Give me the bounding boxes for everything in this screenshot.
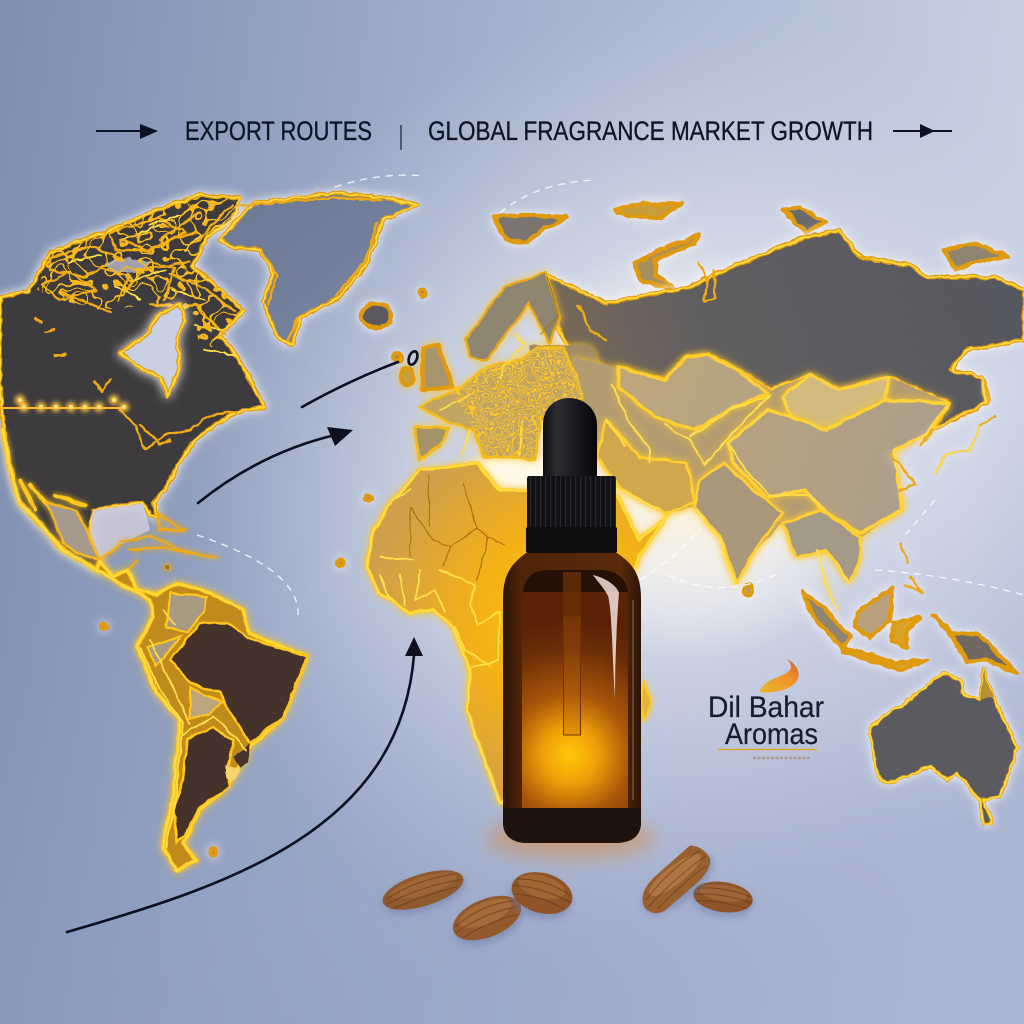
dark base of bottle (503, 808, 641, 843)
inner dropper tube (563, 572, 581, 735)
dark shoulder (523, 570, 628, 592)
map: Asia base (572, 355, 949, 583)
arrow: route to Africa (67, 637, 423, 932)
logo text line 2: Aromas (725, 718, 818, 751)
map: Mediterranean glow (462, 454, 558, 490)
logo text line 1: Dil Bahar (708, 691, 824, 724)
arrow: route to Britain (302, 350, 419, 407)
map: Central Asia (612, 355, 770, 465)
map: Iceland and small islands (101, 290, 426, 855)
map: Mexico (47, 503, 100, 560)
map: China (705, 395, 949, 533)
Hudson Bay (120, 303, 185, 397)
cap collar (526, 527, 617, 553)
almond 5 (691, 878, 755, 920)
map: South America (97, 562, 307, 870)
logo: Dil Bahar Aromas (708, 659, 824, 758)
logo tagline mark (753, 757, 810, 759)
bottle glow (487, 818, 655, 858)
map: Scandinavia (466, 272, 559, 360)
almond 2 (447, 887, 529, 954)
rubber dropper bulb (543, 398, 597, 476)
map: Middle East (597, 420, 695, 513)
map: Madagascar (641, 680, 650, 722)
icon: flame (759, 659, 799, 693)
world map (0, 184, 1024, 939)
divider (400, 125, 402, 150)
map: Gulf of Mexico (90, 503, 150, 558)
almonds (378, 840, 755, 954)
almond 3 (506, 866, 577, 925)
map: North America (0, 195, 265, 570)
almond 1 (378, 862, 469, 921)
heading: export routes: EXPORT ROUTES (185, 116, 372, 146)
map: Greenland (220, 193, 417, 345)
map: Japan and Korea (890, 380, 995, 490)
map: Southeast Asia (783, 510, 860, 610)
map: Caribbean (100, 513, 217, 570)
glass highlight (593, 575, 619, 700)
map: Britain and Ireland (401, 345, 453, 390)
heading: global fragrance market growth: GLOBAL FRAGRANCE MARKET GROWTH (428, 116, 873, 146)
arrow: route to Europe (198, 427, 353, 503)
arrow: header right (893, 124, 952, 138)
map: Africa (367, 463, 668, 803)
arrow: header left (96, 124, 158, 139)
map: India (695, 463, 783, 585)
logo underline (718, 748, 817, 750)
route: dashed shipping lines (197, 175, 1024, 617)
map: Arctic Canada gold veins (37, 195, 242, 347)
map: Europe gold veins (450, 347, 582, 460)
border: US and Canada dotted glow line (0, 395, 129, 412)
map: Europe with gold mesh (415, 335, 620, 460)
map: US west and south coast glow (3, 430, 97, 570)
ribbed cap (527, 476, 616, 527)
map: Indonesia and Philippines (803, 543, 1017, 673)
amber liquid glow (522, 590, 628, 808)
almond 4 (631, 840, 722, 923)
map: Russia (546, 230, 1024, 440)
glass body (503, 553, 641, 843)
map: Mongolia glow band (783, 375, 889, 430)
bottle: amber dropper (503, 398, 641, 843)
map: arctic islands (495, 203, 1008, 292)
header: export routes and market growth (96, 116, 952, 150)
map: Australia (870, 670, 1018, 823)
map: Sri Lanka (744, 584, 752, 596)
